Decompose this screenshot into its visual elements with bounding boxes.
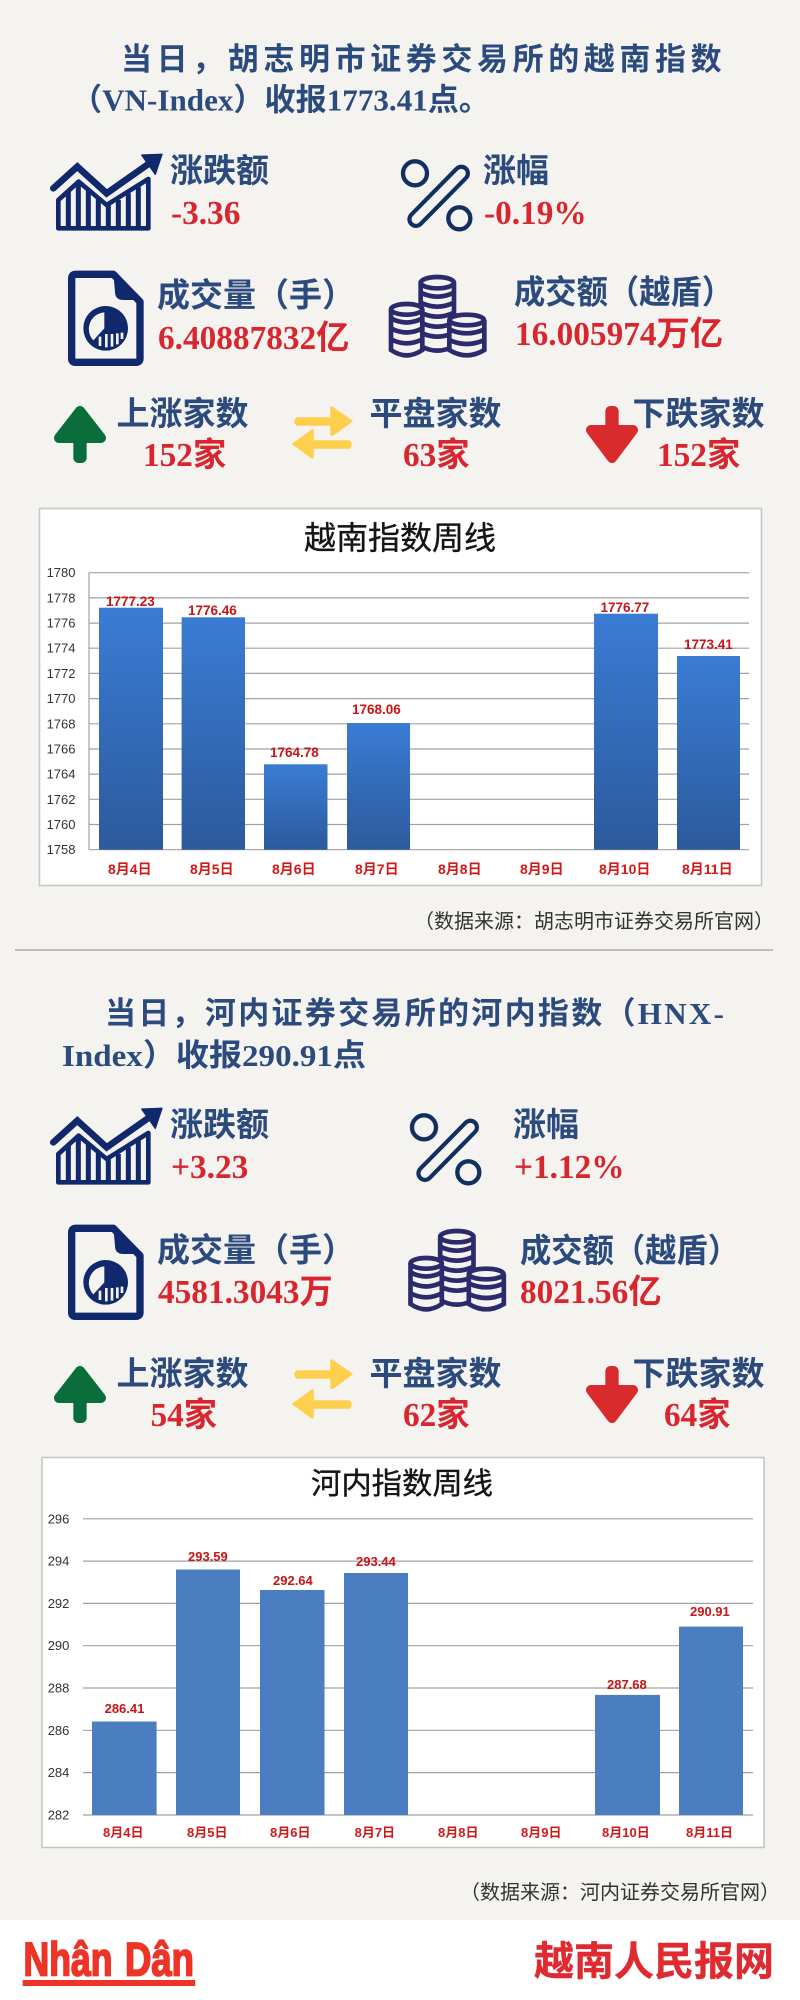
stat: volume: 6.40887832亿: [158, 320, 349, 357]
y axis labels: 292: [48, 1596, 69, 1611]
heading: VN-Index close: （VN-Index）收报1773.41点。: [71, 82, 490, 118]
stat: volume: 4581.3043万: [158, 1274, 333, 1311]
stat: decliners: 64家: [664, 1397, 731, 1434]
y axis labels: 1768: [47, 716, 76, 731]
stat: change percent: +1.12%: [514, 1149, 625, 1186]
heading: VN-Index close: [71, 42, 726, 118]
y axis labels: 286: [48, 1723, 69, 1738]
x axis labels: 8月8日: [438, 861, 482, 877]
y axis labels: 1772: [47, 666, 76, 681]
value labels: 293.59: [188, 1549, 228, 1564]
stat: turnover: 16.005974万亿: [515, 316, 723, 353]
y axis labels: 1778: [47, 590, 76, 605]
chart: VN-Index week: [40, 508, 762, 886]
x axis labels: 8月5日: [187, 1825, 227, 1840]
heading: VN-Index close: 当日，胡志明市证券交易所的越南指数: [121, 42, 726, 77]
y axis labels: 290: [48, 1638, 69, 1653]
stat: change percent: [513, 1107, 625, 1186]
x axis labels: 8月10日: [602, 1825, 650, 1840]
x axis labels: [108, 861, 733, 877]
chart title: 河内指数周线: [311, 1468, 493, 1501]
icon: rising chart: [53, 154, 162, 228]
icon: coin stacks: [410, 1231, 504, 1309]
stat: advancers: [116, 396, 248, 474]
bars: [92, 1570, 743, 1815]
value labels: 1776.46: [188, 603, 237, 618]
x axis labels: 8月7日: [355, 1825, 395, 1840]
value labels: 287.68: [607, 1677, 647, 1692]
icon: coin stacks: [391, 277, 484, 355]
icon: rising chart: [53, 1108, 162, 1182]
icon: yellow swap arrows: [293, 407, 352, 458]
stat: unchanged: [370, 1356, 502, 1434]
logo: Nhan Dan: Nhân: [24, 1932, 112, 1986]
stat: advancers: [116, 1356, 248, 1434]
stat: change percent: 涨幅: [483, 153, 549, 190]
stat: unchanged: 平盘家数: [370, 1356, 502, 1393]
x axis labels: 8月11日: [686, 1825, 733, 1840]
y axis labels: 1762: [47, 792, 76, 807]
heading: HNX-Index close: 当日，河内证券交易所的河内指数（HNX-: [105, 996, 726, 1031]
y axis labels: 1776: [47, 616, 76, 631]
heading: HNX-Index close: Index）收报290.91点: [62, 1038, 366, 1073]
source note: （数据来源：河内证券交易所官网）: [460, 1881, 780, 1904]
x axis labels: 8月6日: [270, 1825, 310, 1840]
stat: change percent: -0.19%: [484, 195, 587, 232]
chart: HNX-Index week: [42, 1458, 764, 1848]
stat: turnover: 8021.56亿: [520, 1274, 662, 1311]
chart title: 越南指数周线: [304, 520, 496, 556]
y axis labels: 1758: [47, 842, 76, 857]
logo: Nhan Dan: Dân: [125, 1932, 194, 1986]
y axis labels: 282: [48, 1808, 69, 1822]
value labels: [106, 594, 733, 760]
value labels: 286.41: [105, 1701, 144, 1716]
x axis labels: 8月10日: [599, 861, 650, 877]
stat: unchanged: 平盘家数: [370, 396, 502, 433]
value labels: 1776.77: [600, 600, 649, 615]
icon: red down arrow: [591, 411, 633, 458]
icon: green up arrow: [59, 1371, 101, 1418]
source note: （数据来源：胡志明市证券交易所官网）: [414, 910, 774, 933]
stat: unchanged: [370, 396, 502, 474]
stat: change amount: -3.36: [171, 195, 240, 232]
y axis labels: 1780: [47, 565, 76, 580]
stat: decliners: 152家: [657, 437, 740, 474]
y axis labels: 1764: [47, 767, 76, 782]
value labels: 1764.78: [270, 745, 319, 760]
panel: HNX-Index section: [42, 996, 780, 1904]
stat: change amount: [170, 1107, 269, 1186]
stat: decliners: 下跌家数: [632, 396, 764, 433]
stat: unchanged: 62家: [403, 1397, 470, 1434]
x axis labels: 8月4日: [108, 861, 152, 877]
stat: volume: [157, 1232, 355, 1311]
stat: turnover: 成交额（越盾）: [520, 1233, 739, 1270]
stat: change amount: +3.23: [171, 1149, 248, 1186]
value labels: [105, 1549, 730, 1716]
value labels: 290.91: [690, 1604, 730, 1619]
stat: advancers: 上涨家数: [116, 1356, 248, 1393]
x axis labels: 8月9日: [520, 861, 564, 877]
bars: [99, 608, 740, 850]
footer band: [0, 1920, 800, 2000]
x axis labels: 8月5日: [190, 861, 234, 877]
stat: change amount: 涨跌额: [170, 1107, 269, 1144]
stat: turnover: [514, 274, 733, 353]
x axis labels: 8月8日: [438, 1825, 478, 1840]
y axis labels: 1774: [47, 641, 76, 656]
stat: volume: 成交量（手）: [157, 278, 355, 314]
icon: percent: [403, 161, 470, 229]
stat: turnover: 成交额（越盾）: [514, 274, 733, 312]
stat: change percent: 涨幅: [513, 1107, 579, 1144]
stat: advancers: 152家: [143, 437, 226, 474]
x axis labels: 8月4日: [103, 1825, 143, 1840]
x axis labels: 8月11日: [682, 861, 733, 877]
publisher name: 越南人民报网: [534, 1940, 774, 1984]
stat: change amount: 涨跌额: [170, 153, 269, 190]
y axis labels: 1770: [47, 691, 76, 706]
y axis labels: 294: [48, 1554, 69, 1569]
value labels: 292.64: [273, 1573, 314, 1588]
stat: volume: [157, 278, 355, 357]
value labels: 293.44: [356, 1554, 397, 1569]
y axis labels: 1766: [47, 742, 76, 756]
icon: green up arrow: [59, 411, 101, 458]
stat: turnover: [520, 1233, 739, 1311]
x axis labels: [103, 1825, 733, 1840]
y axis labels: 296: [48, 1511, 69, 1526]
y axis labels: 284: [48, 1765, 69, 1780]
icon: document pie: [72, 273, 142, 362]
y axis labels: [47, 565, 76, 857]
stat: unchanged: 63家: [403, 437, 470, 474]
value labels: 1768.06: [352, 702, 401, 717]
icon: document pie: [72, 1227, 142, 1316]
logo: Nhan Dan: [23, 1932, 195, 1986]
icon: percent: [412, 1115, 479, 1183]
x axis labels: 8月6日: [272, 861, 316, 877]
heading: HNX-Index close: [62, 996, 726, 1073]
value labels: 1773.41: [684, 637, 733, 652]
stat: advancers: 54家: [150, 1397, 217, 1434]
value labels: 1777.23: [106, 594, 155, 609]
x axis labels: 8月7日: [355, 861, 399, 877]
stat: decliners: [632, 1356, 764, 1434]
stat: decliners: 下跌家数: [632, 1356, 764, 1393]
stat: volume: 成交量（手）: [157, 1232, 355, 1270]
x axis labels: 8月9日: [521, 1825, 561, 1840]
stat: decliners: [632, 396, 764, 474]
stat: advancers: 上涨家数: [116, 396, 248, 433]
y axis labels: [48, 1511, 69, 1822]
stat: change amount: [170, 153, 269, 232]
y axis labels: 288: [48, 1680, 69, 1696]
icon: red down arrow: [591, 1371, 633, 1418]
y axis labels: 1760: [47, 817, 76, 832]
icon: yellow swap arrows: [293, 1360, 352, 1418]
stat: change percent: [483, 153, 587, 232]
panel: VN-Index section: [40, 42, 774, 933]
